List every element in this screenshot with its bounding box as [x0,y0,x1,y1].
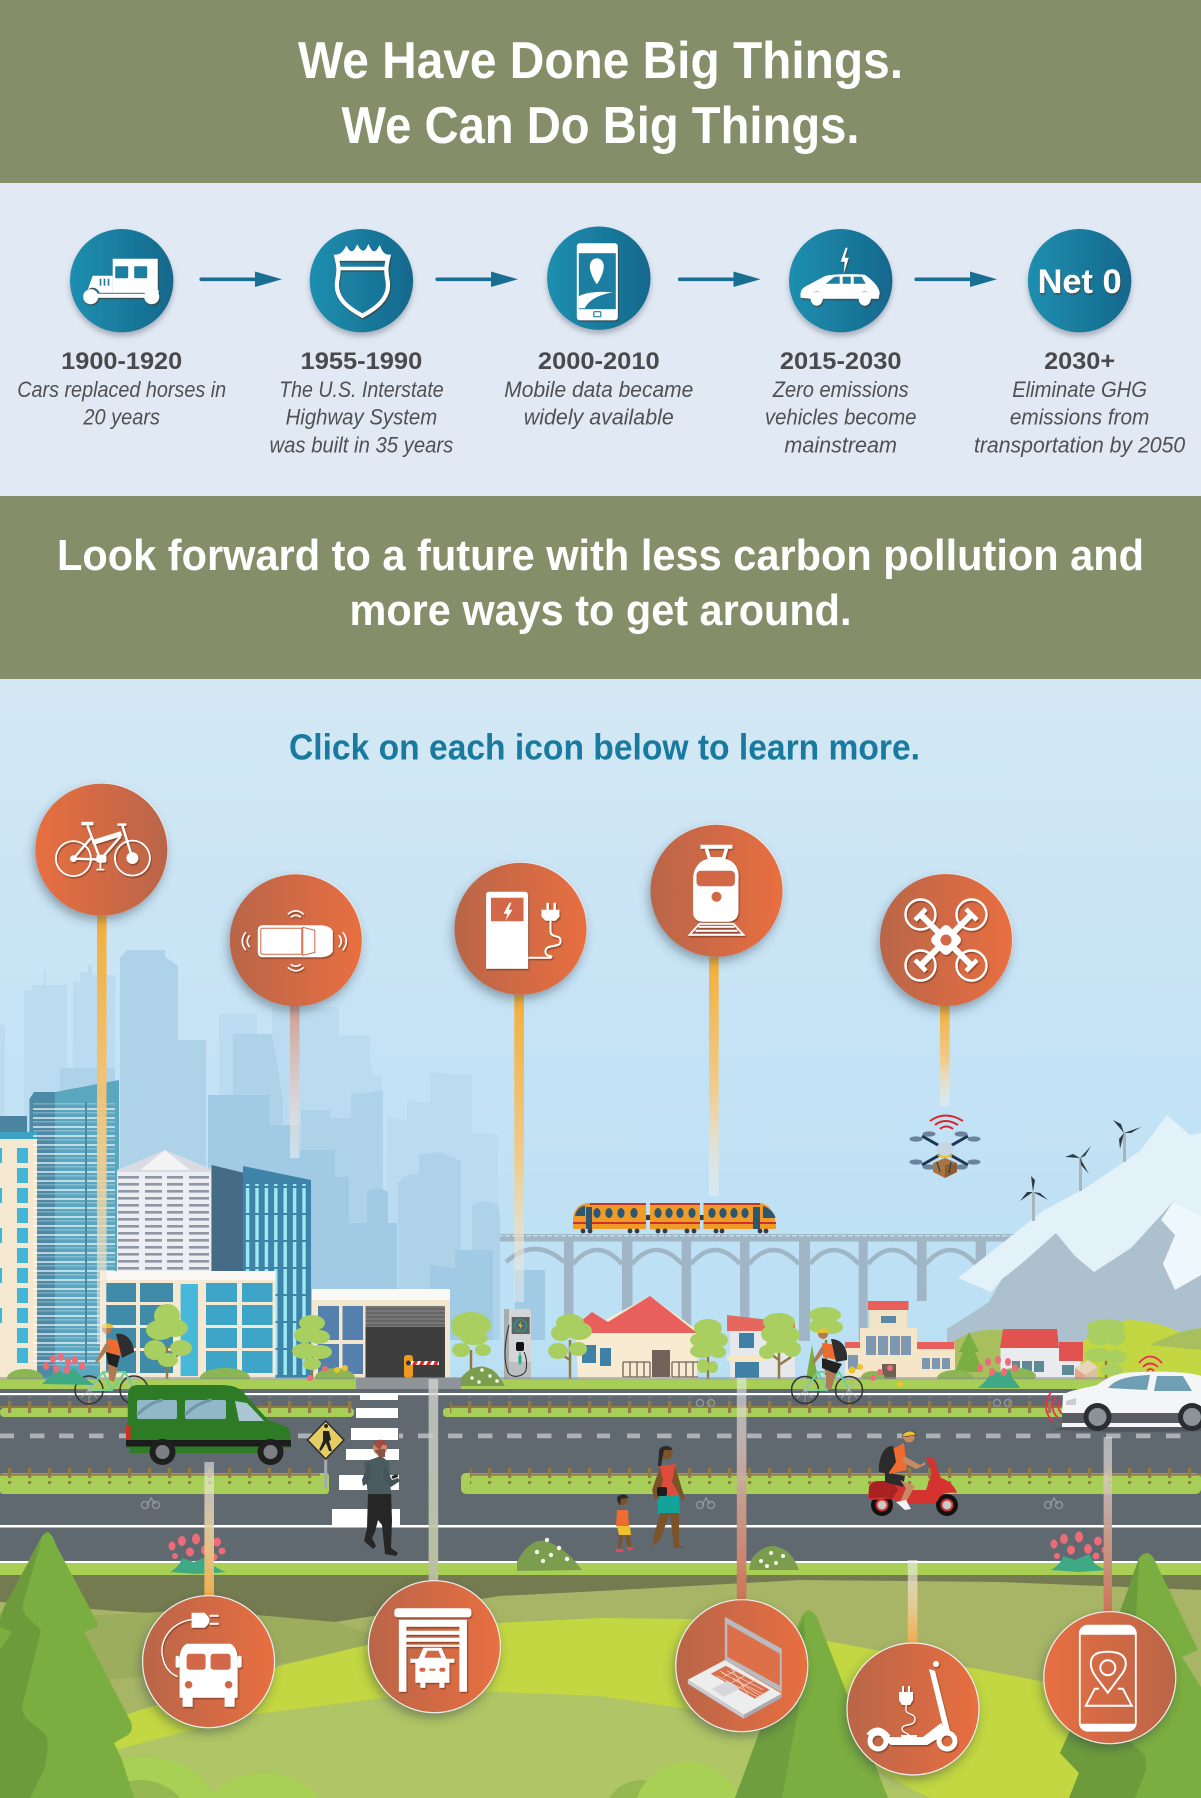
date and caption: emissions from [1010,404,1149,430]
date and caption: Eliminate GHG [1012,377,1147,402]
icon circle: autonomous car [230,873,363,1006]
subheading [57,531,1144,635]
panel: timeline [0,183,1201,496]
garage building [312,1289,450,1380]
banner: top heading background [0,0,1201,183]
city skyline silhouettes [0,950,545,1340]
tulips left roadside [168,1534,226,1574]
date and caption: Zero emissions [772,377,909,402]
subheading: Look forward to a future with less carbon pollution and [57,531,1144,580]
tulips near office [42,1353,94,1385]
house 3 [845,1301,955,1379]
road surface [0,1389,1201,1564]
wind turbines [1020,1120,1141,1221]
arrow [914,272,997,287]
date and caption: 1955-1990 [301,348,422,375]
timeline step 2: 1955-1990 [270,229,453,458]
crosswalk stripes [332,1395,400,1525]
date and caption [504,348,693,430]
date and caption: vehicles become [765,404,916,430]
date and caption: 1900-1920 [61,348,182,375]
cyclist near office [75,1324,148,1404]
house 1 [570,1296,698,1379]
woman with child [616,1446,685,1552]
arrow [200,272,282,287]
bike lane markers [142,1400,1062,1508]
pedestrian crossing sign [308,1421,344,1488]
date and caption: 2030+ [1044,348,1115,375]
subheading: more ways to get around. [350,586,852,635]
date and caption [974,348,1186,458]
date and caption: widely available [524,404,674,430]
icon circle: train [650,824,784,957]
street trees [144,1304,1127,1382]
icon: smartphone with map pin [577,243,618,320]
pine tree right [1060,1553,1201,1798]
timeline step 4: 2015-2030 [765,229,916,458]
date and caption: mainstream [784,432,897,458]
mountains [947,1115,1201,1379]
instruction text: Click on each icon below to learn more. [289,726,920,768]
date and caption: Mobile data became [504,377,693,402]
EV charging station [504,1309,531,1381]
median with fence: lower right [461,1468,1201,1494]
arrow [436,272,518,287]
cyclist near houses [792,1328,862,1404]
icon circle: electric scooter [847,1643,979,1775]
pine tree center [735,1610,888,1798]
date and caption: The U.S. Interstate [279,377,444,402]
icon circle: e-bike [35,783,168,916]
train [573,1203,776,1233]
arrow [678,272,760,287]
icon circle: phone with location pin [1044,1612,1176,1744]
panel: sky background [0,679,1201,1409]
house 4 [1000,1329,1083,1379]
large pine tree left [0,1532,134,1798]
icon circle: parking garage [368,1581,500,1713]
date and caption: 20 years [83,404,160,430]
glass tower building [30,1080,119,1380]
foreground bushes [72,1757,743,1798]
upper green strip and sidewalk [0,1377,1201,1394]
cream tower building [0,1116,37,1382]
tulips right roadside [1050,1532,1108,1572]
median with fence: upper left [0,1397,354,1417]
date and caption [17,348,226,430]
date and caption: Highway System [286,404,437,430]
icon: interstate shield [336,249,388,316]
parking barrier [404,1355,439,1378]
white flower bushes [461,1366,799,1571]
red wifi signal arcs for car [1046,1356,1162,1422]
timeline step 5: 2030+ [974,229,1186,458]
white electric car [1055,1372,1201,1432]
low office building [100,1271,276,1381]
date and caption: was built in 35 years [270,432,453,458]
green shuttle van [126,1385,291,1465]
date and caption [765,348,916,458]
timeline step 3: 2000-2010 [504,227,693,430]
icon circle: EV charger [454,862,588,995]
median with fence: upper right [443,1397,1201,1417]
rolling hills [0,1580,1201,1798]
title [298,32,903,155]
date and caption: Cars replaced horses in [17,377,226,402]
blue grid building [243,1166,311,1378]
icon: antique car [83,259,159,304]
median with fence: lower left [0,1468,329,1494]
date and caption [270,348,453,458]
delivery drone [910,1116,980,1178]
shipping crate [1075,1360,1098,1386]
title: We Have Done Big Things. [298,32,903,90]
icon circle: drone [880,873,1013,1006]
moped rider on red scooter [868,1431,958,1516]
timeline step 1: 1900-1920 [17,229,226,430]
title: We Can Do Big Things. [342,97,860,155]
date and caption: 2000-2010 [538,348,660,375]
lane dashes [0,1434,1180,1438]
icon: electric car [801,248,880,306]
viaduct bridge [500,1234,1020,1341]
man walking with phone [362,1440,400,1556]
evergreen shrub [955,1332,983,1372]
banner: future statement background [0,496,1201,679]
icon circle: laptop [676,1600,808,1732]
connector stems [97,916,1112,1644]
icon circle: electric bus [143,1596,275,1728]
small flowers [307,1364,903,1387]
green hills behind houses [915,1320,1201,1379]
houses [570,1296,1083,1379]
date and caption: 2015-2030 [780,348,902,375]
low bushes along sidewalk [7,1368,1036,1388]
house 2 [727,1315,795,1379]
tulips near houses [977,1356,1020,1388]
grass verge and ground [0,1563,1201,1798]
white tower building [117,1150,211,1274]
dark slate building [212,1165,243,1275]
date and caption: transportation by 2050 [974,432,1186,458]
icon: net zero label: Net 0 [1038,263,1122,301]
tulip bushes [42,1353,1108,1574]
